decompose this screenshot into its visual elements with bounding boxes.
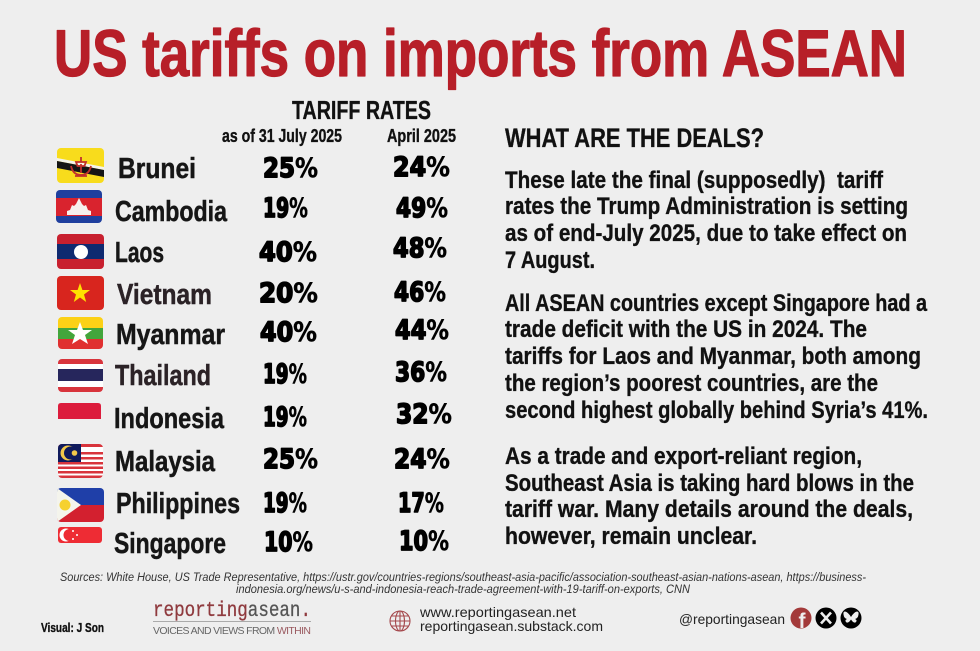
country: Thailand: Thailand <box>115 360 211 392</box>
table heading: TARIFF RATES <box>292 95 431 125</box>
rate: Myanmar July: 40% <box>260 317 317 348</box>
icon: Vietnam flag <box>57 276 104 310</box>
rate: Vietnam April: 46% <box>394 277 446 308</box>
rate: Laos July: 40% <box>259 237 317 268</box>
rate: Philippines April: 17% <box>398 488 444 519</box>
credit: Visual: J Son <box>41 621 104 635</box>
social handle: @reportingasean <box>679 611 785 627</box>
rate: Thailand July: 19% <box>263 359 307 390</box>
sources <box>60 572 866 596</box>
icon: Indonesia flag <box>58 403 101 419</box>
rate: Myanmar April: 44% <box>395 315 449 346</box>
rate: Laos April: 48% <box>393 233 447 264</box>
paragraph 3 <box>505 443 914 550</box>
icon: Malaysia flag <box>58 444 103 478</box>
rate: Malaysia April: 24% <box>394 444 450 475</box>
rate: Indonesia April: 32% <box>396 399 452 430</box>
column heading: April: April 2025 <box>387 126 456 146</box>
paragraph 3: As a trade and export-reliant region, <box>505 443 862 470</box>
rate: Malaysia July: 25% <box>263 444 318 475</box>
paragraph 2 <box>505 290 928 424</box>
paragraph 2: tariffs for Laos and Myanmar, both among <box>505 343 921 370</box>
panel: tariff table <box>56 95 456 560</box>
sources: Sources: White House, US Trade Representative, https://ustr.gov/countries-regions/southeast-asia-pacific/association-southeast-asian-nations-asean, https://business- <box>60 572 866 584</box>
paragraph 3: tariff war. Many details around the deals, <box>505 496 913 523</box>
country: Laos: Laos <box>115 237 164 269</box>
icon: Singapore flag <box>58 527 102 543</box>
country: Philippines: Philippines <box>116 488 240 520</box>
rate: Philippines July: 19% <box>263 488 307 519</box>
country: Brunei: Brunei <box>118 153 196 185</box>
rate: Indonesia July: 19% <box>263 402 307 433</box>
panel: what are the deals <box>505 123 928 550</box>
country: Vietnam: Vietnam <box>117 279 212 311</box>
paragraph 1 <box>505 167 908 274</box>
paragraph 2: the region’s poorest countries, are the <box>505 370 878 397</box>
sources: indonesia.org/news/u-s-and-indonesia-reach-trade-agreement-with-19-tariff-on-exports, CNN <box>236 584 691 596</box>
icon: facebook <box>790 608 812 633</box>
logo: reportingasean: reportingasean. <box>153 600 311 623</box>
icon: Thailand flag <box>58 359 103 392</box>
country: Myanmar: Myanmar <box>116 319 225 351</box>
icon: bluesky <box>840 608 862 628</box>
country: Indonesia: Indonesia <box>114 403 225 435</box>
logo: reportingasean <box>153 600 311 637</box>
rate: Singapore April: 10% <box>399 526 449 557</box>
country: Malaysia: Malaysia <box>115 446 216 478</box>
rate: Vietnam July: 20% <box>259 278 318 309</box>
icon: Cambodia flag <box>56 190 102 223</box>
icon: Laos flag <box>57 234 104 269</box>
paragraph 1: rates the Trump Administration is setting <box>505 193 908 220</box>
icon: Myanmar flag <box>58 317 103 349</box>
paragraph 1: as of end-July 2025, due to take effect on <box>505 220 907 247</box>
rate: Thailand April: 36% <box>395 357 447 388</box>
paragraph 3: however, remain unclear. <box>505 523 757 550</box>
icon: Philippines flag <box>57 488 104 522</box>
icon: globe <box>390 611 410 631</box>
icon: Brunei flag <box>57 148 104 183</box>
website links: reportingasean.substack.com <box>420 618 603 634</box>
rate: Brunei April: 24% <box>393 152 450 183</box>
website links: www.reportingasean.net <box>419 604 576 620</box>
deals heading: WHAT ARE THE DEALS? <box>505 123 764 153</box>
rate: Cambodia July: 19% <box>263 193 308 224</box>
icon: X <box>816 608 836 628</box>
website links <box>419 604 603 634</box>
rate: Cambodia April: 49% <box>396 193 448 224</box>
rate: Brunei July: 25% <box>263 153 318 184</box>
paragraph 1: 7 August. <box>505 247 595 274</box>
paragraph 2: trade deficit with the US in 2024. The <box>505 316 867 343</box>
column heading: July: as of 31 July 2025 <box>222 126 342 146</box>
rate: Singapore July: 10% <box>264 527 313 558</box>
paragraph 1: These late the final (supposedly) tariff <box>505 167 884 194</box>
logo: reportingasean: VOICES AND VIEWS FROM WITHIN <box>153 625 311 637</box>
icon: facebook: f <box>798 610 806 633</box>
country: Cambodia: Cambodia <box>115 196 228 228</box>
country: Singapore: Singapore <box>114 528 226 560</box>
